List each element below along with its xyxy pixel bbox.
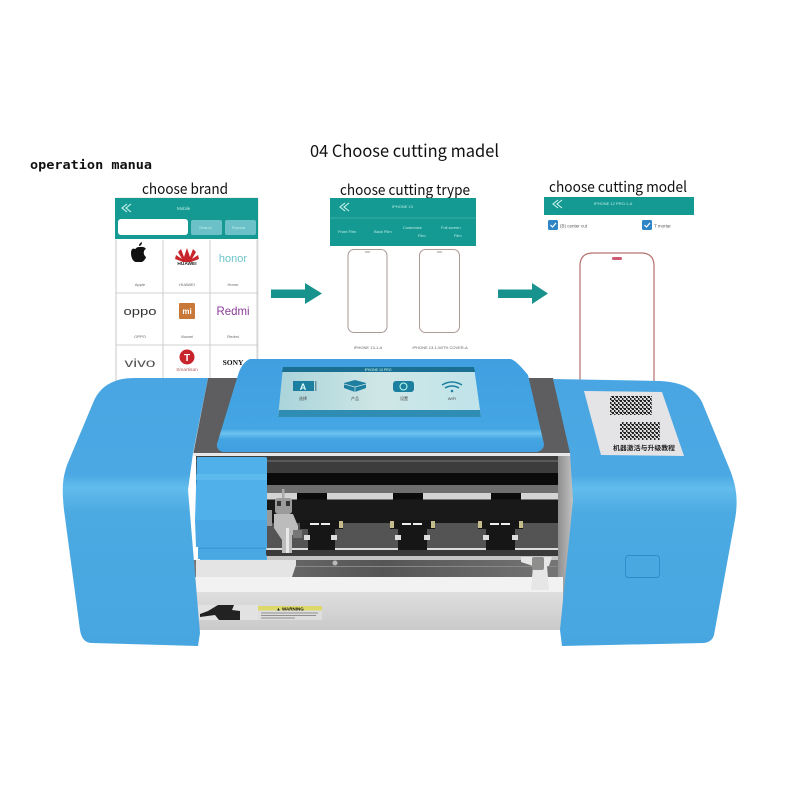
type panel header: Full screen [441, 225, 461, 230]
brand panel header: Mobile [177, 206, 191, 211]
checkbox: T mortar [642, 220, 671, 230]
brand: smartisan [176, 350, 198, 373]
brand: vivo: vivo [124, 356, 156, 370]
brand: sony: SONY [223, 358, 244, 367]
screen icon: A: 选择 [299, 395, 307, 401]
carriage cover [195, 457, 267, 560]
model panel header: IPHONE 12 PRO-1-A [594, 201, 633, 206]
machine interior [193, 453, 577, 630]
sticker caption: 机器激活与升级教程 [613, 443, 676, 452]
panel: choose cutting model app screen [544, 197, 694, 400]
screen icon: wifi: WIFI [448, 396, 456, 401]
heading: choose cutting model: choose cutting model [549, 176, 687, 197]
brand: redmi [216, 304, 250, 339]
brand: honor: Honor [228, 282, 239, 287]
screen icon: refresh [393, 381, 414, 401]
left housing [63, 378, 208, 646]
brand: smartisan: Smartisan [176, 367, 198, 373]
brand: xiaomi: mi [182, 307, 192, 316]
screen icon: A: A [300, 382, 307, 392]
phone outline: type A: IPHONE 13-1-A [354, 345, 383, 350]
brand: redmi: Redmi [227, 334, 239, 339]
machine: cutting plotter [63, 359, 737, 646]
panel: choose cutting type app screen [330, 198, 476, 350]
model panel header [544, 197, 694, 215]
operation manual label: operation manua [30, 157, 152, 172]
screen icon: wifi [442, 382, 462, 401]
paper guide strip [265, 493, 561, 500]
title: 04 Choose cutting madel [310, 137, 499, 162]
checkbox: T mortar: T mortar [654, 224, 671, 228]
type panel header [330, 198, 476, 246]
brand panel header: Repeat [232, 225, 246, 230]
brand: apple: Apple [135, 282, 146, 287]
warning pictogram [197, 605, 259, 620]
heading: choose cutting trype: choose cutting trype [340, 179, 470, 200]
brand: redmi: Redmi [216, 304, 250, 318]
QR code bottom [620, 422, 660, 440]
phone outline: type A [348, 250, 387, 350]
brand: oppo: OPPO [134, 334, 146, 339]
brand: xiaomi: Xiaomi [181, 334, 193, 339]
type panel header: Front Flim [338, 229, 357, 234]
top cover [217, 359, 544, 452]
type panel header: IPHONE 13 [392, 204, 414, 209]
screen title bar: IPHONE 13 PRO [365, 368, 392, 372]
roller 1 [300, 520, 343, 550]
brand: huawei [175, 248, 199, 287]
brand: honor [219, 253, 247, 287]
right side inner wall [558, 456, 577, 630]
touch screen [278, 367, 481, 417]
panel: choose brand app screen [115, 198, 258, 388]
phone outline: type B [412, 250, 468, 350]
brand: huawei: HUAWEI [177, 261, 197, 267]
phone outline: selected model [580, 253, 654, 400]
brand: honor: honor [219, 253, 247, 265]
screen icon: A [293, 381, 316, 401]
rollers [300, 520, 523, 550]
brand: apple [131, 242, 146, 287]
QR code top [610, 396, 652, 415]
arrow: type to model [498, 283, 548, 304]
warning label: ▲ WARNING [276, 606, 304, 611]
phone outline: type B: IPHONE 13-1-WITH COVER-A [412, 345, 468, 350]
heading: choose brand: choose brand [142, 178, 228, 199]
silver front base [193, 560, 563, 630]
QR sticker [584, 391, 684, 456]
type panel header: Film [418, 233, 426, 238]
screen icon: box: 产品 [351, 395, 359, 401]
checkbox: center cut: (B) center cut [560, 224, 588, 228]
brand: oppo [124, 306, 156, 339]
warning label [258, 606, 322, 620]
type panel header: Back Film [374, 229, 392, 234]
brand: smartisan: T [184, 353, 190, 364]
arrow: brand to type [271, 283, 322, 304]
machine back panel [193, 378, 572, 455]
checkbox: center cut [548, 220, 588, 230]
screen icon: refresh: 设置 [400, 395, 408, 401]
brand: oppo: oppo [124, 306, 156, 318]
screen title bar [282, 367, 475, 372]
brand panel header [115, 198, 258, 239]
brand grid lines [116, 240, 258, 385]
screen icon: box [344, 380, 366, 401]
roller 3 [478, 520, 523, 550]
brand: xiaomi [179, 303, 195, 339]
right housing button [626, 556, 660, 578]
type panel header: Film [454, 233, 462, 238]
screen footer bar [278, 410, 481, 417]
type panel header: Customize [403, 225, 423, 230]
knob clamp [521, 557, 552, 590]
roller 2 [390, 520, 435, 550]
right housing [553, 379, 737, 646]
brand panel header: Search [199, 225, 212, 230]
brand: huawei: HUAWEI [179, 282, 195, 287]
tool head [267, 489, 302, 553]
